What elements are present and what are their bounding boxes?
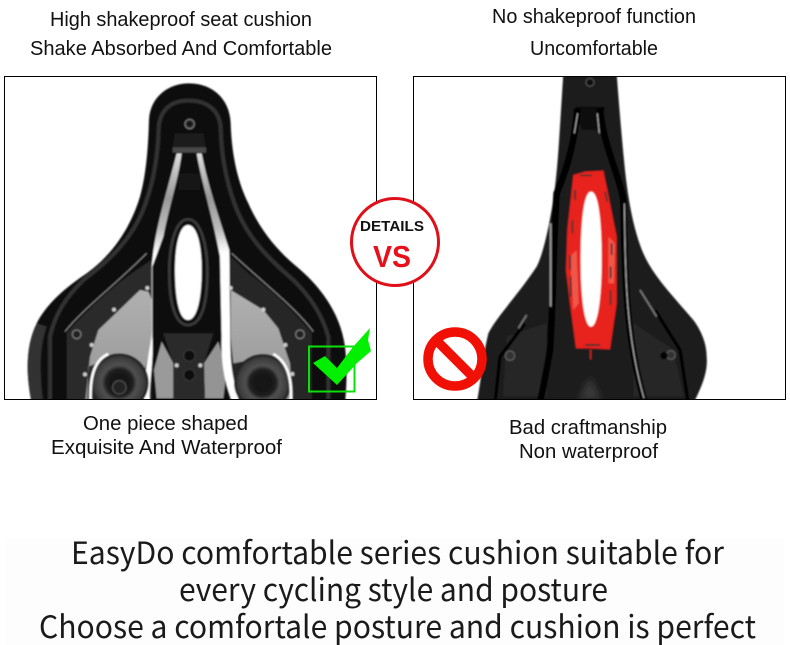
- bottom message band: EasyDo comfortable series cushion suitable for: [71, 528, 725, 573]
- icon: green check mark: [309, 328, 371, 392]
- caption: right column: [509, 417, 667, 463]
- heading: left column: [30, 9, 332, 60]
- saddle photo: underside of uncomfortable cushion: [477, 73, 707, 403]
- grey plates: [85, 290, 152, 403]
- heading: right column: [492, 6, 696, 60]
- icon: red prohibition sign: [428, 332, 482, 386]
- inner dark grey field: [67, 260, 152, 400]
- metal rails: [144, 153, 182, 403]
- heading: left column: High shakeproof seat cushion: [50, 9, 312, 31]
- saddle photo: underside of comfortable cushion: [28, 83, 347, 412]
- panel: high shakeproof saddle: [4, 76, 376, 412]
- panel: no shakeproof saddle: [414, 73, 786, 403]
- bottom message band: [6, 528, 784, 645]
- caption: left column: One piece shaped: [83, 413, 248, 435]
- central hole with dark surround: [167, 220, 210, 318]
- badge: details vs: DETAILS: [360, 218, 424, 235]
- red insert: [566, 171, 617, 349]
- heading: right column: No shakeproof function: [492, 6, 696, 28]
- bottom message band: every cycling style and posture: [179, 565, 608, 610]
- caption: right column: Bad craftmanship: [509, 417, 667, 439]
- heading: right column: Uncomfortable: [530, 38, 658, 60]
- heading: left column: Shake Absorbed And Comfortable: [30, 38, 332, 60]
- caption: left column: [51, 413, 282, 459]
- badge: details vs: VS: [373, 239, 411, 274]
- wheels: [94, 352, 150, 399]
- badge: details vs: [352, 198, 438, 286]
- caption: right column: Non waterproof: [519, 441, 658, 463]
- caption: left column: Exquisite And Waterproof: [51, 437, 282, 459]
